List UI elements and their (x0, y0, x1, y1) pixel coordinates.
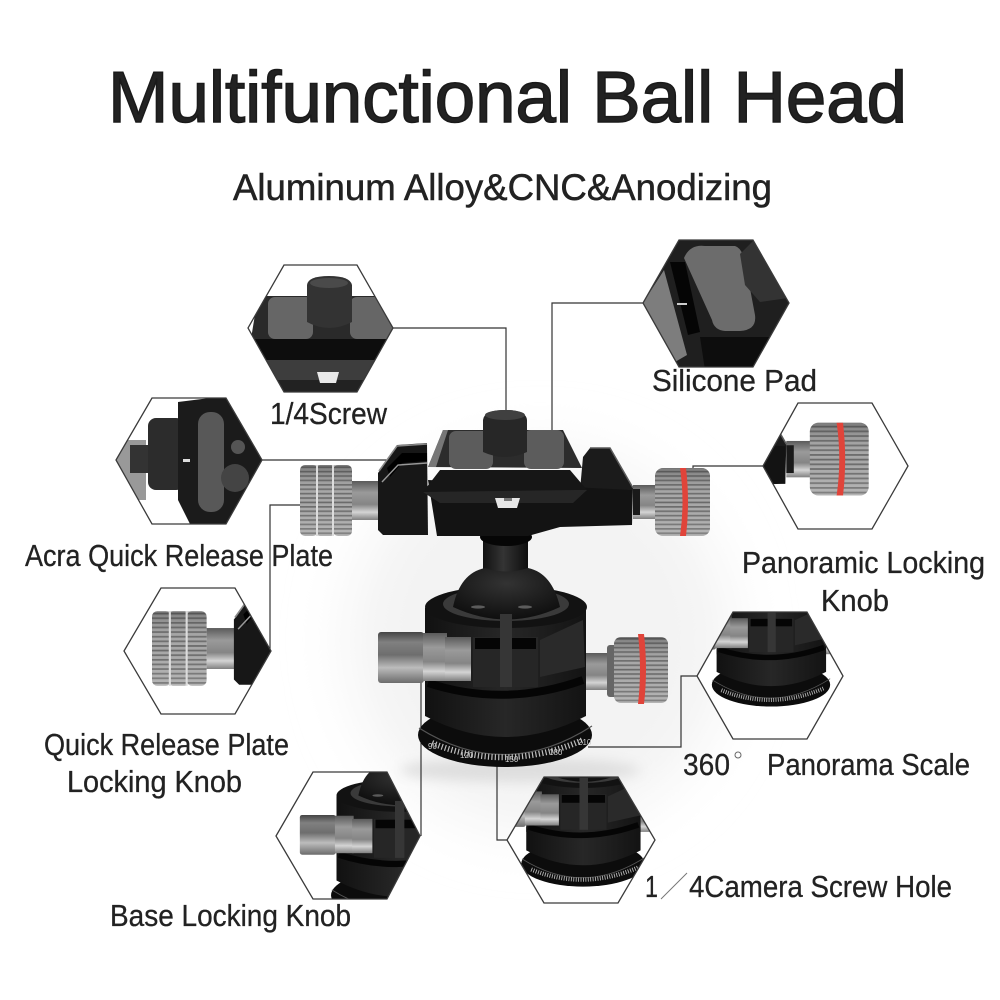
hexagon frame (507, 777, 655, 903)
detail image: plate side (114, 396, 264, 526)
detail image: knob (152, 604, 270, 686)
label: Quick Release Plate (44, 727, 289, 762)
hexagon frame (697, 612, 843, 739)
label: Base Locking Knob (110, 898, 351, 933)
title: Multifunctional Ball Head (108, 58, 907, 138)
label: Silicone Pad (652, 363, 817, 398)
detail image: screw (252, 276, 392, 392)
panorama scale numbers: 180 (549, 748, 563, 757)
hexagon frame (763, 403, 908, 529)
ball head base (378, 528, 668, 767)
detail image: pad (640, 238, 792, 370)
panorama scale numbers: 150 (505, 755, 519, 764)
label second line: Knob (821, 583, 889, 618)
panel: camera screw hole (506, 776, 951, 904)
detail image: knob (764, 422, 869, 496)
panorama scale numbers: 90 (428, 742, 437, 751)
panorama scale numbers: 120 (460, 751, 474, 760)
panel: quick release plate locking knob (45, 587, 288, 799)
panorama scale numbers (428, 738, 592, 764)
label: 1/4Screw (270, 396, 388, 431)
panel: acra quick release plate (25, 396, 333, 573)
hexagon frame (643, 240, 789, 367)
hexagon frame (116, 398, 262, 524)
detail image: base knob (300, 772, 420, 898)
panel: panoramic locking knob (744, 402, 984, 612)
leader lines (262, 303, 763, 840)
subtitle: Aluminum Alloy&CNC&Anodizing (233, 167, 772, 208)
label: Panorama Scale (767, 747, 970, 782)
panorama scale numbers: 210 (578, 738, 592, 747)
product: ball head (300, 410, 710, 767)
background shading (350, 450, 730, 830)
label: Panoramic Locking (742, 545, 985, 580)
label number: 360 (683, 747, 730, 782)
panel: 1/4 screw (245, 260, 396, 431)
label: Acra Quick Release Plate (25, 538, 333, 573)
panel: 360 panorama scale (684, 611, 969, 776)
hexagon frame (124, 588, 271, 714)
panel: silicone pad (640, 238, 817, 398)
panel: base locking knob (112, 771, 421, 933)
label digit: 1 (645, 869, 658, 904)
slash (661, 873, 687, 899)
quick release clamp (300, 410, 710, 536)
degree symbol (735, 752, 741, 758)
hexagon frame (276, 772, 420, 899)
detail image: scale (698, 612, 830, 706)
detail image: base (516, 778, 650, 887)
label second line: Locking Knob (67, 764, 242, 799)
label: 4Camera Screw Hole (689, 869, 952, 904)
hexagon frame (248, 265, 393, 392)
